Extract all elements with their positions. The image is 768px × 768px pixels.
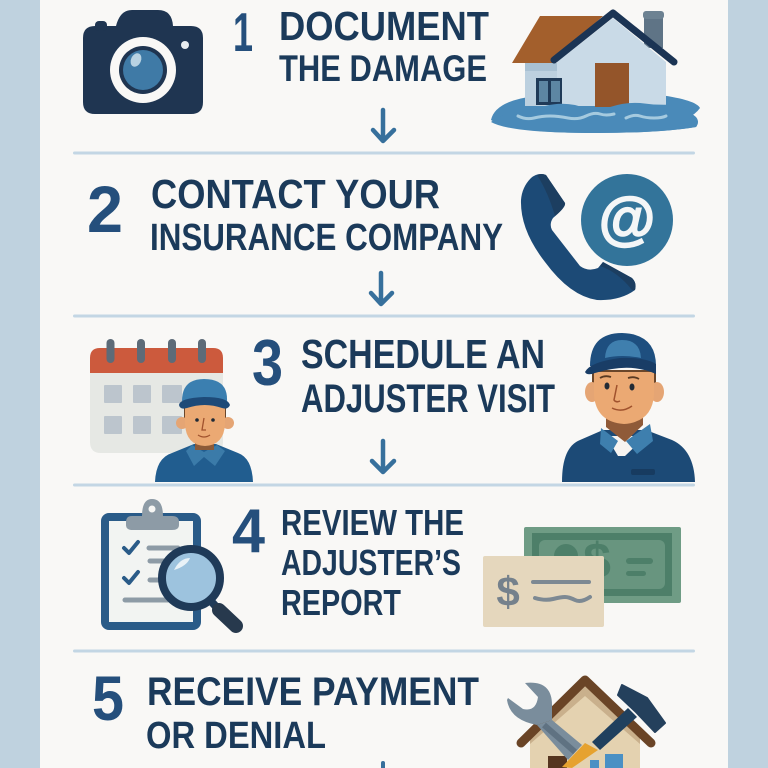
heading: contact your insurance company: INSURANCE COMPANY [150, 217, 503, 259]
step 2 [87, 171, 673, 304]
icon: house with tools [507, 680, 665, 768]
heading: review the adjuster's report: ADJUSTER’S [281, 542, 461, 583]
heading: document the damage [279, 3, 489, 89]
icon: money and cheque: $ [583, 533, 611, 589]
heading: review the adjuster's report: REVIEW THE [281, 502, 464, 543]
heading: document the damage: DOCUMENT [279, 3, 489, 49]
heading: review the adjuster's report [281, 502, 464, 623]
icon: adjuster [562, 333, 695, 482]
icon: flooded house [491, 11, 700, 133]
icon: clipboard and magnifier [105, 499, 236, 626]
heading: schedule an adjuster visit: ADJUSTER VISIT [301, 377, 555, 421]
arrow [381, 763, 385, 768]
heading: receive payment or denial: RECEIVE PAYMENT [147, 670, 479, 714]
number 5: 5 [92, 664, 124, 734]
heading: receive payment or denial: OR DENIAL [146, 715, 326, 757]
heading: receive payment or denial [146, 670, 479, 757]
heading: document the damage: THE DAMAGE [279, 48, 487, 89]
icon: phone and at sign [521, 174, 673, 300]
icon: calendar with adjuster [90, 339, 253, 482]
icon: money and cheque [483, 527, 681, 627]
step 3 [90, 326, 695, 482]
heading: contact your insurance company: CONTACT YOUR [151, 171, 440, 217]
number 4: 4 [232, 497, 265, 566]
number 1: 1 [233, 1, 253, 63]
heading: contact your insurance company [150, 171, 503, 259]
heading: schedule an adjuster visit: SCHEDULE AN [301, 331, 545, 377]
step 5 [92, 664, 665, 768]
step 4 [105, 497, 681, 627]
arrow [371, 273, 392, 304]
icon: phone and at sign: @ [599, 186, 655, 251]
heading: review the adjuster's report: REPORT [281, 582, 401, 623]
icon: money and cheque: $ [496, 568, 520, 615]
icon: camera [83, 10, 203, 114]
arrow [373, 110, 394, 141]
number 2: 2 [87, 172, 123, 246]
arrow [372, 441, 394, 472]
number 3: 3 [252, 326, 283, 399]
step 1 [83, 1, 700, 141]
heading: schedule an adjuster visit [301, 331, 555, 421]
